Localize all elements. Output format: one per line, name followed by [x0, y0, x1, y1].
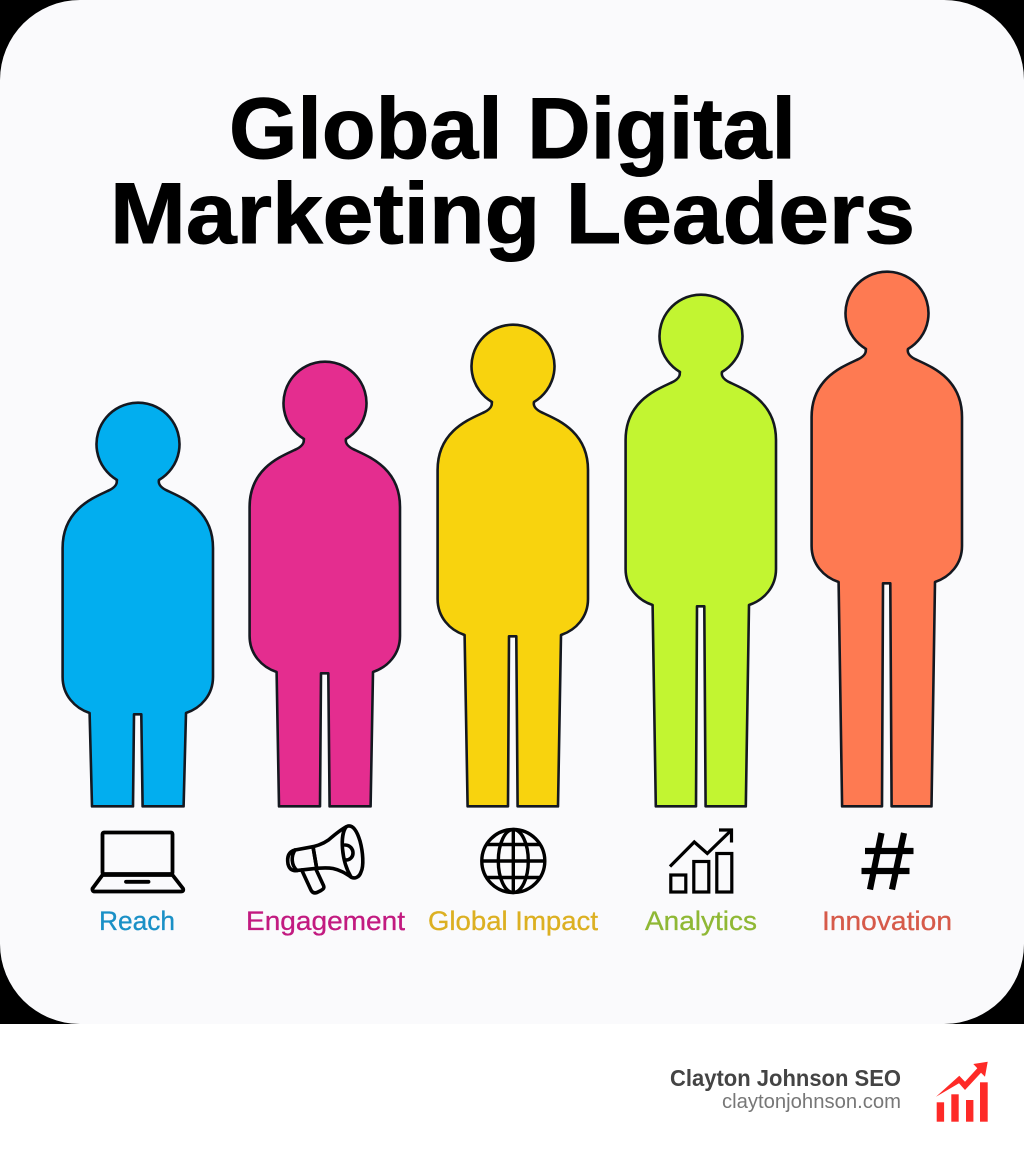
figure: Analytics (lime): [626, 295, 776, 806]
icon: footer logo: [936, 1062, 988, 1122]
label: Innovation: Innovation: [822, 906, 952, 936]
labels row: [99, 906, 952, 936]
label: Reach: Reach: [99, 906, 175, 936]
title: Global Digital: [229, 81, 796, 177]
footer brand text: Clayton Johnson SEO: [670, 1065, 901, 1091]
label: Global Impact: Global Impact: [428, 906, 599, 936]
label: Analytics: Analytics: [645, 906, 757, 936]
figure: Innovation (orange): [812, 272, 962, 806]
title: Marketing Leaders: [110, 166, 915, 262]
icon: megaphone: [288, 826, 363, 893]
figure: Engagement (magenta): [250, 362, 400, 806]
figures row: [63, 272, 962, 806]
figure: Global Impact (yellow): [438, 325, 588, 806]
icon: laptop: [92, 832, 183, 892]
figure: Reach (blue): [63, 403, 213, 806]
icon: globe: [482, 830, 545, 892]
footer brand text: claytonjohnson.com: [722, 1091, 901, 1113]
icon: hashtag: [862, 833, 914, 890]
footer brand text: [670, 1065, 901, 1113]
label: Engagement: Engagement: [246, 906, 406, 936]
icon: analytics chart: [670, 830, 732, 892]
title: [110, 81, 915, 262]
